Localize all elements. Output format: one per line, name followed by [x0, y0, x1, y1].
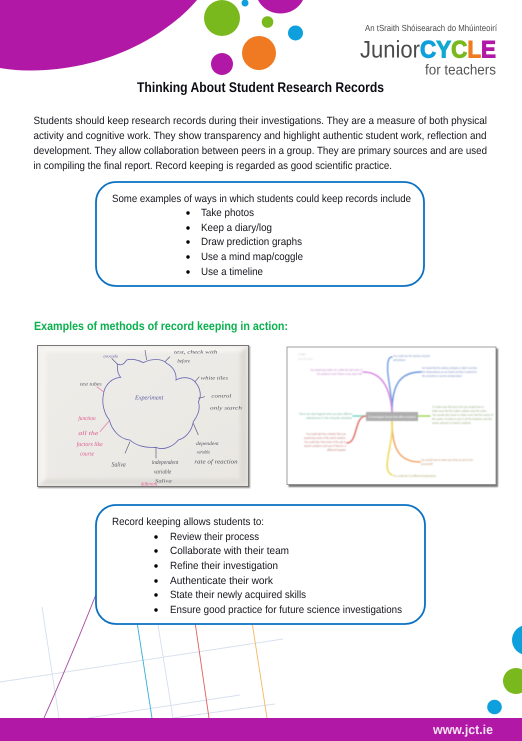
shape: large blue circle at right edge: [512, 625, 522, 655]
photo: whiteboard mind map: all the: [78, 430, 98, 436]
photo: digital mind map (Coggle): To investigate factors that affect enzymes: [368, 415, 416, 419]
photo: whiteboard mind map: independent: [152, 459, 179, 465]
mind map notes: the enzyme to survive temperature: [422, 374, 462, 378]
bullet list: Draw prediction graphs: [201, 236, 302, 248]
mind map notes: Test to see what happens when you place different: [299, 412, 352, 416]
bullet list: Authenticate their work: [170, 575, 274, 587]
bullet list: Review their process: [170, 531, 259, 543]
intro paragraph: in compiling the final report. Record keeping is regarded as good scientific practice.: [34, 160, 392, 172]
mind map notes: You could use the salivary enzyme: [393, 354, 430, 358]
mind map notes: starch solution and see if there's a: [304, 444, 346, 448]
mind map notes: amylase: [393, 358, 405, 362]
shape: small green circle: [262, 16, 273, 28]
photo: whiteboard mind map: only starch: [210, 405, 242, 411]
logo: Junior Cycle for teachers: [360, 23, 497, 78]
mind map notes: You could also heat some of the spit or: [304, 440, 347, 444]
decorative grid lines: [0, 592, 283, 718]
photo: whiteboard mind map: before: [177, 359, 190, 364]
photo: whiteboard mind map: Saliva: [112, 461, 126, 468]
shape: large green circle: [204, 0, 240, 36]
bullet list: [154, 531, 402, 616]
mind map notes: To make sure this test is fair you would have to: [432, 405, 484, 409]
shape: small blue circle: [487, 700, 502, 714]
mind map notes: same amount of starch solution: [432, 421, 471, 425]
bullet list: State their newly acquired skills: [170, 589, 306, 601]
mind map notes: Logo: [298, 352, 306, 356]
decorative footer circles: [487, 625, 522, 714]
mind map notes: the solution to test if there is any starch left: [317, 372, 362, 376]
mind map notes: the same of saliva is put in all the beakers and the: [432, 417, 492, 421]
panel: examples of ways to keep records: [96, 182, 424, 286]
photo: whiteboard mind map: course: [80, 450, 94, 457]
logo word: Junior: Junior: [360, 36, 420, 64]
photo: whiteboard mind map: dependent: [196, 441, 219, 446]
decorative header shapes: [0, 0, 303, 75]
mind map notes: substances in the enzyme amylase: [306, 416, 352, 420]
bullet list: Use a mind map/coggle: [201, 251, 303, 263]
logo word: CYCLE: CYCLE: [420, 36, 496, 64]
mind map notes: the temperatures as we found out that it worked for: [422, 370, 478, 374]
bullet list: [186, 207, 303, 278]
photo: whiteboard mind map: control: [211, 393, 231, 399]
panel: what record keeping allows: [96, 505, 425, 624]
mind map branches: [347, 357, 430, 475]
logo tagline: An tSraith Shóisearach do Mhúinteoirí: [365, 23, 497, 33]
shape: purple circle: [211, 53, 233, 75]
mind map notes: You would also have to make sure that the name of: [432, 413, 493, 417]
photo: whiteboard mind map: variable: [197, 449, 210, 455]
intro paragraph: activity and cognitive work. They show transparency and highlight authentic student work, reflection and: [34, 130, 487, 142]
intro paragraph: development. They allow collaboration between peers in a group. They are primary sources and are used: [34, 145, 487, 157]
mind map notes: make sure that the iodine solution was the same.: [432, 409, 487, 413]
mind map notes: task for the enzyme: [298, 357, 313, 361]
shape: small blue circle top: [242, 0, 248, 6]
logo subtitle: for teachers: [425, 62, 496, 78]
photo: whiteboard mind map: Saliva: [155, 478, 172, 484]
photo: whiteboard mind map: avocado: [103, 353, 118, 358]
bullet list: Ensure good practice for future science investigations: [170, 604, 402, 616]
title: Thinking About Student Research Records: [137, 79, 384, 95]
bullet list: Collaborate with their team: [170, 545, 289, 557]
photo: whiteboard mind map: Experiment: [135, 394, 164, 401]
mind map notes: yourself: [421, 462, 433, 466]
bullet list: Keep a diary/log: [201, 222, 272, 234]
mind map notes: You could test it at different temperatures: [393, 474, 436, 478]
mind map notes: You would spit into a beaker then you: [306, 432, 346, 436]
shape: green circle at right edge: [503, 668, 522, 694]
mind map notes: different beaker: [327, 448, 347, 452]
photo: whiteboard mind map: white tiles: [201, 375, 228, 381]
photo: digital mind map (Coggle): [287, 347, 498, 487]
bullet list: Use a timeline: [201, 266, 263, 278]
section heading: Examples of methods of record keeping in action:: [34, 319, 288, 333]
mind map notes: would drop some of the starch solution.: [304, 436, 346, 440]
mind map notes: You would drop iodine on a white tile add some of: [310, 368, 362, 372]
bullet list: Refine their investigation: [170, 560, 278, 572]
panel outline: [96, 182, 424, 286]
intro paragraph: Students should keep research records during their investigations. They are a measure of both physical: [34, 115, 487, 127]
footer website: www.jct.ie: [432, 722, 493, 737]
shape: orange circle: [242, 36, 276, 70]
photo: whiteboard mind map: different: [141, 481, 158, 487]
shape: blue circle: [288, 26, 303, 40]
panel intro text: Some examples of ways in which students could keep records include: [112, 193, 411, 205]
panel outline: [96, 505, 425, 624]
photo: whiteboard mind map: factors like: [77, 441, 103, 447]
bullet list: Take photos: [201, 207, 254, 219]
shape: large purple corner curve: [0, 0, 197, 70]
footer bar: [0, 718, 522, 741]
shape: purple arc at top: [258, 0, 303, 14]
photo: whiteboard mind map: rate of reaction: [194, 458, 238, 465]
photo: whiteboard mind map: [38, 346, 250, 488]
photo: whiteboard mind map: test tubes: [80, 382, 102, 387]
mind map notes: we found that the salivary amylase is able to survive: [422, 366, 477, 370]
intro paragraph: [34, 115, 487, 172]
photo: whiteboard mind map: function: [78, 415, 96, 421]
mind map notes: [298, 352, 493, 478]
panel intro text: Record keeping allows students to:: [112, 516, 264, 528]
photo: whiteboard mind map: variable: [154, 468, 171, 475]
photo: whiteboard mind map: test, check with: [174, 349, 217, 355]
mind map notes: you would have to make sure that you don't burn: [421, 458, 473, 462]
mind map central node: [366, 412, 418, 421]
